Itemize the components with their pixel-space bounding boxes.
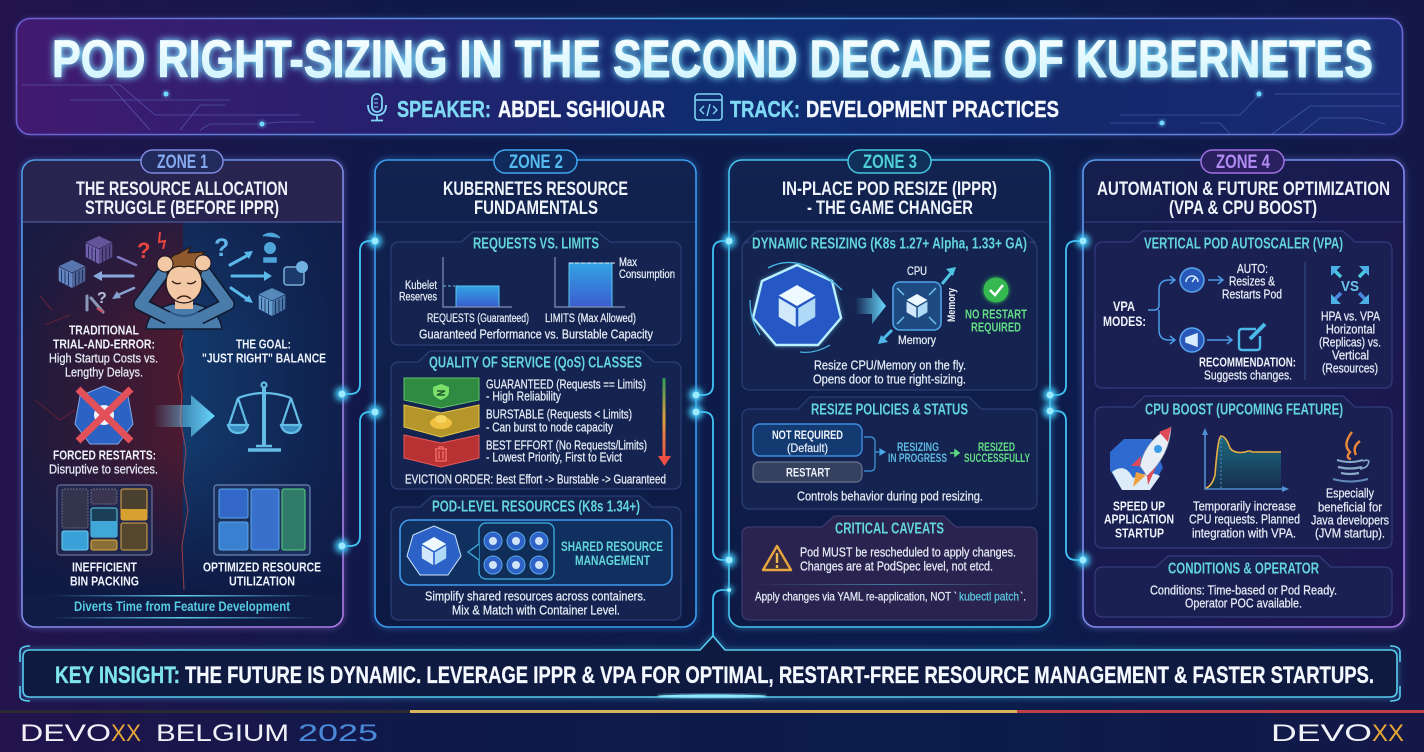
text: vpa modes <box>1103 298 1146 329</box>
icon: glowing pod <box>750 262 842 352</box>
text: resize description <box>813 358 966 387</box>
qos descriptions: GUARANTEED (Requests == Limits) <box>486 378 646 392</box>
text: java note: Especially <box>1326 486 1374 501</box>
text: caveat details: Pod MUST be rescheduled to apply changes. <box>800 545 1016 560</box>
zone 3 heading <box>782 179 997 219</box>
status: resized successfully: SUCCESSFULLY <box>964 453 1030 465</box>
arrow: eviction severity <box>658 378 671 466</box>
tier: guaranteed <box>404 378 479 408</box>
sub-panel: pod-level resources: POD-LEVEL RESOURCES (K8s 1.34+) <box>432 498 640 516</box>
sub-panel: requests vs limits: REQUESTS VS. LIMITS <box>473 236 599 252</box>
panel: zone 2 kubernetes resource fundamentals <box>375 150 696 627</box>
text: java note <box>1311 486 1389 541</box>
sub-panel: dynamic resizing <box>742 231 1037 390</box>
footer colour strip <box>0 710 1424 713</box>
status: resizing in progress: RESIZING <box>897 442 939 454</box>
text: the goal <box>202 336 326 366</box>
text: java note: beneficial for <box>1318 500 1383 515</box>
qos descriptions: BEST EFFORT (No Requests/Limits) <box>486 438 647 452</box>
qos descriptions: - Lowest Priority, First to Evict <box>486 450 622 464</box>
footer logo: devoxx belgium 2025: XX <box>111 720 141 747</box>
status: resizing in progress: IN PROGRESS <box>888 453 947 465</box>
chart captions: LIMITS (Max Allowed) <box>545 313 636 325</box>
text: forced restarts: FORCED RESTARTS: <box>53 448 156 462</box>
text: java note: (JVM startup). <box>1315 526 1385 541</box>
flow: mode branches <box>1148 268 1232 352</box>
shared resource card: SHARED RESOURCE <box>561 539 663 554</box>
text: speed up startup <box>1104 499 1174 541</box>
text: auto mode: Resizes & <box>1229 274 1276 288</box>
text: controls behavior: Controls behavior during pod resizing. <box>797 489 983 504</box>
speaker line: SPEAKER: <box>397 96 491 122</box>
text: speed up startup: APPLICATION <box>1104 512 1174 527</box>
panel: zone 1 resource allocation struggle <box>22 150 343 627</box>
text: pod-level description: Mix & Match with Container Level. <box>452 603 620 618</box>
zone 2 heading: KUBERNETES RESOURCE <box>443 179 628 200</box>
zone 2 heading: FUNDAMENTALS <box>474 198 598 219</box>
text: caveat details: Changes are at PodSpec level, not etcd. <box>800 559 993 574</box>
text: traditional trial and error: TRADITIONAL <box>69 322 139 338</box>
sub-panel: resize policies and status: RESIZE POLICIES & STATUS <box>811 402 968 418</box>
arrow: resize flow <box>855 288 886 324</box>
icon: code window <box>695 94 722 120</box>
text: hpa vs vpa: (Resources) <box>1322 362 1378 376</box>
text: apply changes note: Apply changes via YAML re-application, NOT ` <box>755 589 957 603</box>
shared resource card: MANAGEMENT <box>575 553 651 568</box>
text: speed up startup: STARTUP <box>1115 526 1164 541</box>
text: traditional trial and error: High Startup Costs vs. <box>49 350 158 366</box>
icon: warning triangle <box>763 546 791 570</box>
track line: DEVELOPMENT PRACTICES <box>806 96 1059 122</box>
chart captions <box>419 313 653 342</box>
text: auto mode <box>1222 262 1282 302</box>
zone 3 heading: IN-PLACE POD RESIZE (IPPR) <box>782 179 997 200</box>
bar chart: requests: Kubelet <box>405 280 438 292</box>
text: apply changes note: kubectl patch <box>959 589 1019 603</box>
track line <box>730 96 1059 122</box>
text: hpa vs vpa: Vertical <box>1332 348 1369 362</box>
text: caveat details <box>800 545 1016 574</box>
icon: resized container with cpu and memory <box>878 264 958 347</box>
text: the goal: "JUST RIGHT" BALANCE <box>202 350 326 366</box>
zone 1 heading: STRUGGLE (BEFORE IPPR) <box>85 198 279 219</box>
illustration: stressed engineer <box>140 247 228 329</box>
text: cpu boost description: integration with VPA. <box>1192 526 1296 541</box>
text: recommendation mode <box>1199 356 1296 382</box>
zone 1 pill: ZONE 1 <box>157 152 208 173</box>
zone 3 heading: - THE GAME CHANGER <box>807 198 973 219</box>
icon: hpa vs vpa: VS <box>1341 278 1359 295</box>
speaker line <box>397 96 665 122</box>
icon: resized container with cpu and memory: Memory <box>946 287 958 322</box>
bar chart: requests: Reserves <box>399 292 437 304</box>
text: forced restarts <box>49 448 158 476</box>
button: restart <box>753 462 862 482</box>
connector nodes <box>335 234 1090 594</box>
diagram: optimized utilization <box>214 485 310 555</box>
qos descriptions: BURSTABLE (Requests < Limits) <box>486 408 632 422</box>
text: pod-level description <box>425 589 646 618</box>
button: not required default: (Default) <box>787 441 828 455</box>
track line: TRACK: <box>730 96 800 122</box>
icon: balance scales <box>228 382 301 450</box>
bracket arrow <box>864 437 885 471</box>
text: cpu boost description <box>1189 499 1300 541</box>
bar chart: limits: Max <box>619 257 637 269</box>
qos descriptions <box>486 378 647 464</box>
sub-panel: quality of service classes: QUALITY OF SERVICE (QoS) CLASSES <box>429 354 642 372</box>
text: recommendation mode: Suggests changes. <box>1204 368 1292 382</box>
sub-panel: cpu boost: CPU BOOST (UPCOMING FEATURE) <box>1145 402 1343 418</box>
qos descriptions: - High Reliability <box>486 390 562 404</box>
zone 4 pill: ZONE 4 <box>1216 152 1270 173</box>
text: resize description: Opens door to true right-sizing. <box>813 372 966 387</box>
chart captions: REQUESTS (Guaranteed) <box>427 313 529 325</box>
footer logo: devoxx <box>1271 720 1404 747</box>
bar chart: limits <box>555 257 675 307</box>
connector lines between zones <box>342 241 1083 637</box>
text: vpa modes: VPA <box>1113 298 1135 314</box>
shared resource card <box>400 520 672 585</box>
text: hpa vs vpa: (Replicas) vs. <box>1319 336 1381 350</box>
sub-panel: conditions and operator <box>1095 556 1392 617</box>
button: not required default: NOT REQUIRED <box>772 428 843 442</box>
button: restart: RESTART <box>786 466 831 480</box>
qos descriptions: - Can burst to node capacity <box>486 420 614 434</box>
text: recommendation mode: RECOMMENDATION: <box>1199 356 1296 370</box>
text: pod-level description: Simplify shared resources across containers. <box>425 589 646 604</box>
sub-panel: vertical pod autoscaler <box>1095 231 1392 388</box>
text: the goal: THE GOAL: <box>236 336 291 352</box>
zone 4 heading: (VPA & CPU BOOST) <box>1169 198 1317 219</box>
speaker line: ABDEL SGHIOUAR <box>498 96 665 122</box>
icons: chaotic containers on the left: ? <box>97 290 107 307</box>
icons: scattered resources on the right <box>214 233 308 316</box>
tier: best effort <box>404 435 479 467</box>
labels: bin packing captions <box>70 560 321 588</box>
footer logo: devoxx belgium 2025: BELGIUM <box>156 720 289 747</box>
sub-panel: pod-level resources <box>391 496 681 620</box>
icon: rocket on kubernetes hexagon <box>1110 427 1171 490</box>
sub-panel: requests vs limits <box>391 232 681 345</box>
text: apply changes note: `. <box>1020 589 1026 603</box>
banner: key insight: KEY INSIGHT: <box>55 662 180 689</box>
icon: java cup <box>1333 432 1369 482</box>
bar chart: requests <box>399 257 512 307</box>
zone 2 heading <box>443 179 628 219</box>
text: java note: Java developers <box>1311 513 1389 528</box>
callout: no restart required <box>965 278 1027 334</box>
text: cpu boost description: CPU requests. Planned <box>1189 512 1300 527</box>
icon: microphone <box>368 94 386 120</box>
sub-panel: vertical pod autoscaler: VERTICAL POD AUTOSCALER (VPA) <box>1144 236 1343 252</box>
zone 3 pill: ZONE 3 <box>863 152 917 173</box>
banner: key insight <box>20 636 1400 701</box>
zone 4 heading <box>1097 179 1390 219</box>
icon: crossed out kubernetes <box>75 386 133 444</box>
status: resizing in progress <box>888 442 947 465</box>
tier: burstable <box>404 405 479 437</box>
text: hpa vs vpa <box>1319 310 1381 376</box>
arrow: status progression <box>950 450 959 456</box>
diagram: inefficient bin packing <box>57 485 152 555</box>
sub-panel: dynamic resizing: DYNAMIC RESIZING (K8s 1.27+ Alpha, 1.33+ GA) <box>752 236 1027 252</box>
panel: zone 3 in-place pod resize <box>729 150 1050 627</box>
text: auto mode: Restarts Pod <box>1222 288 1282 302</box>
text: conditions details: Conditions: Time-based or Pod Ready. <box>1150 583 1337 598</box>
zone 2 pill: ZONE 2 <box>509 152 563 173</box>
status: resized successfully: RESIZED <box>978 442 1015 454</box>
sub-panel: critical caveats: CRITICAL CAVEATS <box>835 520 944 538</box>
sub-panel: quality of service classes <box>391 351 681 489</box>
text: resize description: Resize CPU/Memory on the fly. <box>814 358 966 373</box>
icons: scattered resources on the right: ? <box>214 234 229 262</box>
labels: bin packing captions: OPTIMIZED RESOURCE <box>203 560 321 574</box>
arrow: from struggle to goal <box>153 395 215 437</box>
text: speed up startup: SPEED UP <box>1113 499 1165 514</box>
chart captions: Guaranteed Performance vs. Burstable Capacity <box>419 327 653 342</box>
text: conditions details: Operator POC available. <box>1185 596 1302 611</box>
labels: bin packing captions: INEFFICIENT <box>72 560 137 574</box>
callout: diverts time: Diverts Time from Feature Development <box>74 598 290 614</box>
footer logo: devoxx belgium 2025: DEVO <box>20 720 111 747</box>
text: vpa modes: MODES: <box>1103 313 1146 329</box>
button: not required default <box>753 424 862 456</box>
icons: chaotic containers on the left: ? <box>137 238 150 263</box>
text: auto mode: AUTO: <box>1237 262 1268 276</box>
text: traditional trial and error: TRIAL-AND-ERROR: <box>53 336 155 352</box>
bar chart: limits: Consumption <box>619 269 675 281</box>
callout: no restart required: NO RESTART <box>965 306 1027 322</box>
footer logo: devoxx: XX <box>1372 720 1404 747</box>
sub-panel: resize policies and status <box>742 397 1037 509</box>
icon: hpa vs vpa <box>1331 266 1369 304</box>
status: resized successfully <box>964 442 1030 465</box>
text: cpu boost description: Temporarily increase <box>1193 499 1296 514</box>
text: hpa vs vpa: HPA vs. VPA <box>1321 310 1381 324</box>
icons: chaotic containers on the left <box>59 232 165 312</box>
labels: bin packing captions: UTILIZATION <box>229 574 295 588</box>
sub-panel: cpu boost <box>1095 396 1392 548</box>
panel: zone 4 automation and future optimization <box>1083 150 1404 627</box>
header banner <box>16 18 1403 135</box>
icon: edit recommendation <box>1239 324 1265 350</box>
text: traditional trial and error <box>49 322 158 380</box>
icon: resized container with cpu and memory: Memory <box>898 333 936 347</box>
footer logo: devoxx belgium 2025 <box>20 720 378 747</box>
text: forced restarts: Disruptive to services. <box>49 462 158 476</box>
text: traditional trial and error: Lengthy Delays. <box>65 364 143 380</box>
callout: no restart required: REQUIRED <box>971 320 1021 334</box>
chart: cpu boost curve <box>1202 428 1289 492</box>
icon: resized container with cpu and memory: CPU <box>907 264 927 278</box>
footer logo: devoxx: DEVO <box>1271 720 1372 747</box>
labels: bin packing captions: BIN PACKING <box>70 574 139 588</box>
sub-panel: critical caveats <box>742 516 1037 620</box>
text: conditions details <box>1150 583 1337 611</box>
zone 1 heading <box>76 179 288 219</box>
footer logo: devoxx belgium 2025: 2025 <box>298 720 378 747</box>
sub-panel: conditions and operator: CONDITIONS & OPERATOR <box>1168 560 1319 578</box>
text: eviction order: EVICTION ORDER: Best Effort -> Burstable -> Guaranteed <box>405 472 666 486</box>
zone 1 heading: THE RESOURCE ALLOCATION <box>76 179 288 200</box>
text: hpa vs vpa: Horizontal <box>1326 322 1375 336</box>
